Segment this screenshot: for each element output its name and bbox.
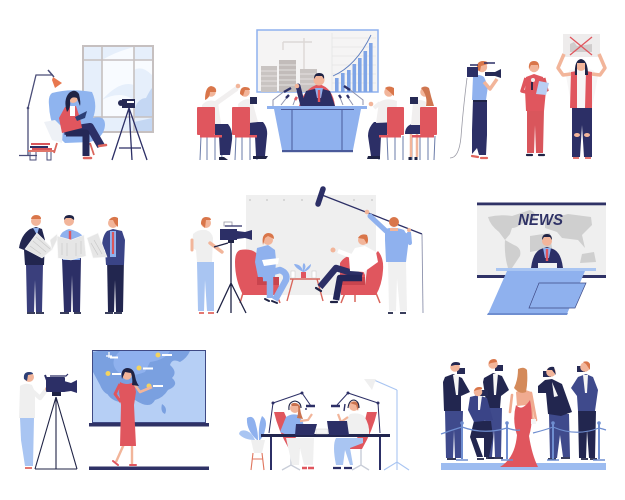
NEWS heading: NEWS <box>518 212 563 229</box>
weather map screen <box>92 350 206 422</box>
man in dark jacket <box>19 215 45 313</box>
camera on tripod <box>112 99 147 160</box>
world map <box>488 210 596 268</box>
crouching photographer <box>468 387 494 459</box>
desk <box>261 434 390 470</box>
floor lamp <box>364 379 409 470</box>
weather presenter <box>113 368 152 465</box>
right red chair <box>350 412 377 470</box>
laptops and name plate <box>295 421 349 435</box>
floor strip <box>441 463 606 470</box>
side table with books <box>28 143 54 160</box>
photographer five <box>571 361 598 459</box>
camera cable <box>450 78 467 158</box>
journalist with raised hand <box>197 84 240 160</box>
protester with sign <box>558 34 605 158</box>
cameraman <box>19 372 49 468</box>
floor lamp <box>19 70 62 156</box>
coffee table with plant <box>287 263 323 301</box>
open newspapers <box>25 233 107 260</box>
man in blue shirt <box>60 215 83 313</box>
woman journalist with camera <box>405 86 437 160</box>
panel: press conference <box>197 30 437 160</box>
cameraman <box>467 61 501 158</box>
field reporter <box>522 61 549 155</box>
podium <box>267 106 367 152</box>
window <box>83 46 153 132</box>
growth bar chart <box>332 33 376 92</box>
woman podcaster <box>280 401 314 468</box>
presentation screen <box>257 30 378 92</box>
photographer three <box>483 359 509 458</box>
microphone arms <box>269 392 380 433</box>
camera on tripod <box>35 374 77 469</box>
panel: woman reading on camera <box>19 46 153 160</box>
interviewer woman <box>255 233 286 303</box>
anchor desk <box>487 268 596 315</box>
right armchair <box>340 251 383 303</box>
panel: men reading newspapers <box>19 215 125 313</box>
panel: podcast studio <box>239 379 409 470</box>
panel: red carpet paparazzi <box>441 359 606 470</box>
camera on tripod <box>214 222 252 313</box>
rope barrier <box>441 422 606 460</box>
potted plant <box>239 416 266 470</box>
interviewee man <box>316 234 378 302</box>
journalist with camera <box>232 87 268 160</box>
weather symbols <box>106 352 172 388</box>
man in navy jacket <box>102 217 125 313</box>
cameraman <box>192 217 222 313</box>
boom microphone <box>318 189 423 313</box>
reading woman <box>59 91 106 158</box>
panel: news anchor desk <box>477 202 606 315</box>
studio backdrop <box>246 195 376 295</box>
newspaper columns <box>30 237 102 256</box>
man podcaster <box>333 400 369 468</box>
photographer one <box>443 362 470 459</box>
microphones <box>273 86 363 106</box>
boom operator <box>365 210 411 313</box>
left armchair <box>235 250 280 303</box>
panel: weather forecast <box>19 350 209 470</box>
panel: TV interview studio <box>192 189 423 313</box>
journalist gesturing <box>367 86 404 160</box>
armchair <box>44 90 105 155</box>
panel: street reporting <box>450 34 605 158</box>
left red chair <box>274 412 300 470</box>
news anchor <box>531 234 563 269</box>
speaker at podium <box>295 73 335 106</box>
crane and buildings <box>261 38 317 92</box>
photographer four <box>538 367 572 459</box>
woman in red gown <box>500 368 538 467</box>
